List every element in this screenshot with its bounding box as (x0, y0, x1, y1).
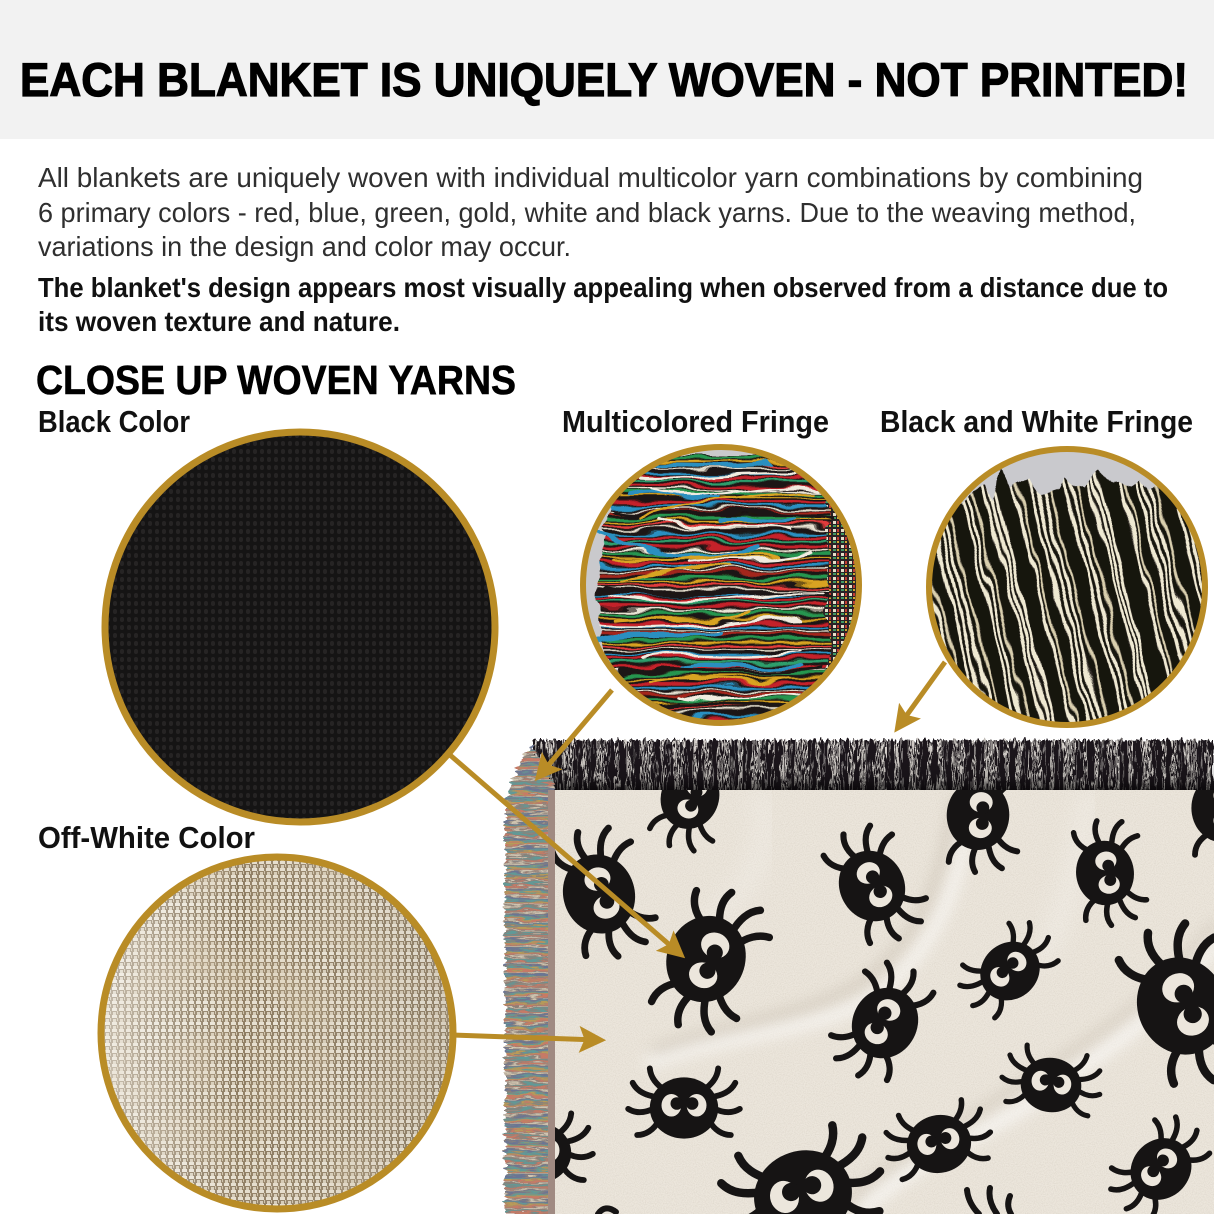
intro paragraph: 6 primary colors - red, blue, green, gold, white and black yarns. Due to the weaving method, (38, 197, 1136, 228)
circle: off-white color swatch (100, 855, 455, 1210)
circle: black and white fringe swatch (925, 445, 1210, 730)
section heading: CLOSE UP WOVEN YARNS (36, 357, 516, 403)
arrow: black swatch to spider (450, 755, 679, 953)
blanket (481, 737, 1214, 1214)
fabric folds (650, 795, 1214, 1214)
intro paragraph: variations in the design and color may occur. (38, 231, 571, 262)
label: black and white fringe: Black and White Fringe (880, 404, 1193, 439)
intro paragraph: All blankets are uniquely woven with individual multicolor yarn combinations by combining (38, 162, 1143, 193)
label: black color: Black Color (38, 404, 190, 439)
spider pattern (555, 790, 1214, 1214)
arrow: multicolored fringe to blanket edge (540, 690, 612, 775)
circle: black color swatch (100, 430, 500, 830)
arrow: off-white swatch to blanket (452, 1035, 598, 1040)
header band (0, 0, 1214, 139)
top black and white fringe (532, 740, 1214, 798)
left multicolored fringe (505, 745, 556, 1214)
blanket body (555, 790, 1214, 1214)
arrow: black and white fringe to blanket top (899, 662, 945, 726)
bold note: its woven texture and nature. (38, 306, 400, 337)
label: multicolored fringe: Multicolored Fringe (562, 404, 829, 439)
circle: multicolored fringe swatch (580, 445, 865, 730)
intro paragraph (38, 162, 1143, 262)
label: off-white color: Off-White Color (38, 820, 255, 855)
bold note (38, 272, 1168, 337)
